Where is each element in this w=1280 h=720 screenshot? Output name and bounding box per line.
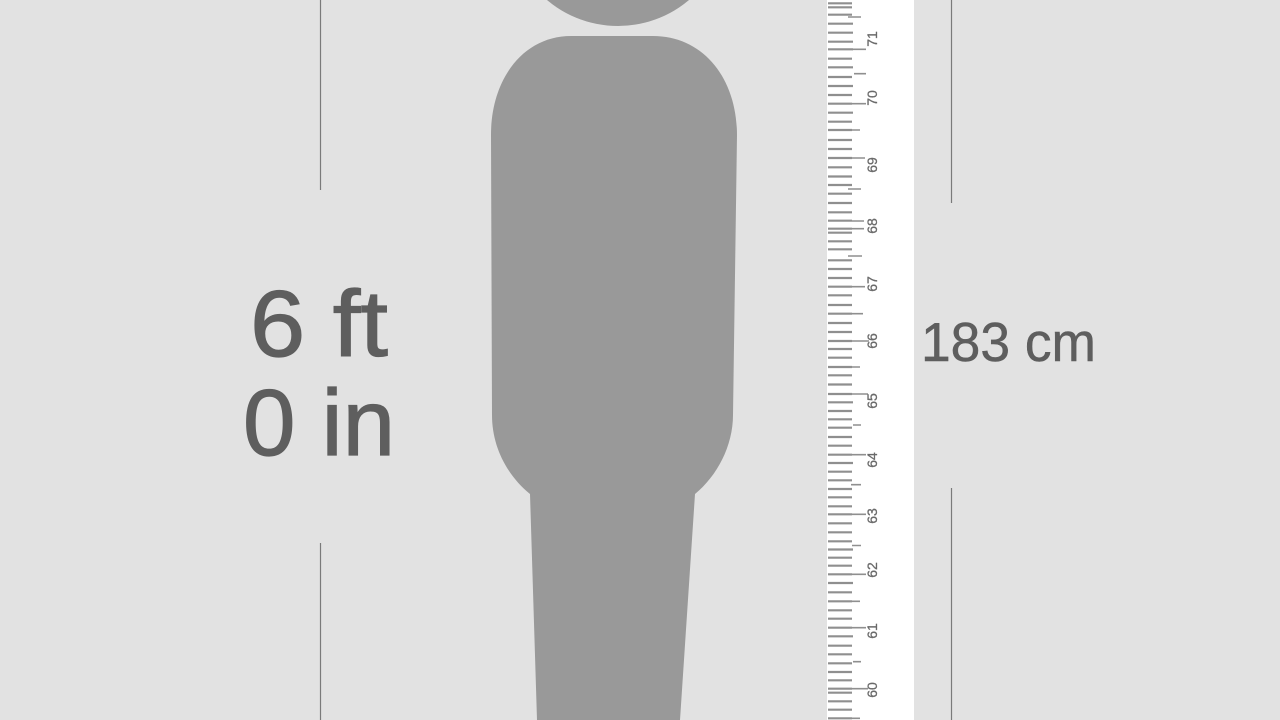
ruler inch labels: 71	[864, 31, 880, 47]
person silhouette	[491, 0, 737, 720]
ruler minor ticks	[828, 3, 853, 718]
ruler inch labels: 64	[864, 452, 880, 468]
ruler inch labels: 69	[864, 157, 880, 173]
ruler inch labels: 67	[864, 276, 880, 292]
height label in feet and inches	[243, 271, 395, 475]
ruler inch labels: 68	[864, 218, 880, 234]
ruler inch labels: 62	[864, 562, 880, 578]
ruler inch labels: 60	[864, 682, 880, 698]
height label in feet and inches: 6 ft	[250, 271, 388, 376]
ruler inch labels: 70	[864, 90, 880, 106]
height label in feet and inches: 0 in	[243, 370, 395, 475]
ruler major ticks	[848, 17, 869, 718]
ruler inch labels: 66	[864, 333, 880, 349]
ruler inch labels: 63	[864, 508, 880, 524]
silhouette head	[508, 0, 728, 26]
ruler	[827, 0, 914, 720]
ruler inch labels: 61	[864, 623, 880, 639]
silhouette body and legs	[491, 36, 737, 720]
ruler inch labels: 65	[864, 393, 880, 409]
ruler inch labels	[864, 31, 880, 698]
left height marker line	[320, 0, 322, 720]
height label in centimetres: 183 cm	[921, 311, 1096, 373]
right height marker line	[950, 0, 952, 720]
ruler strip	[827, 0, 914, 720]
